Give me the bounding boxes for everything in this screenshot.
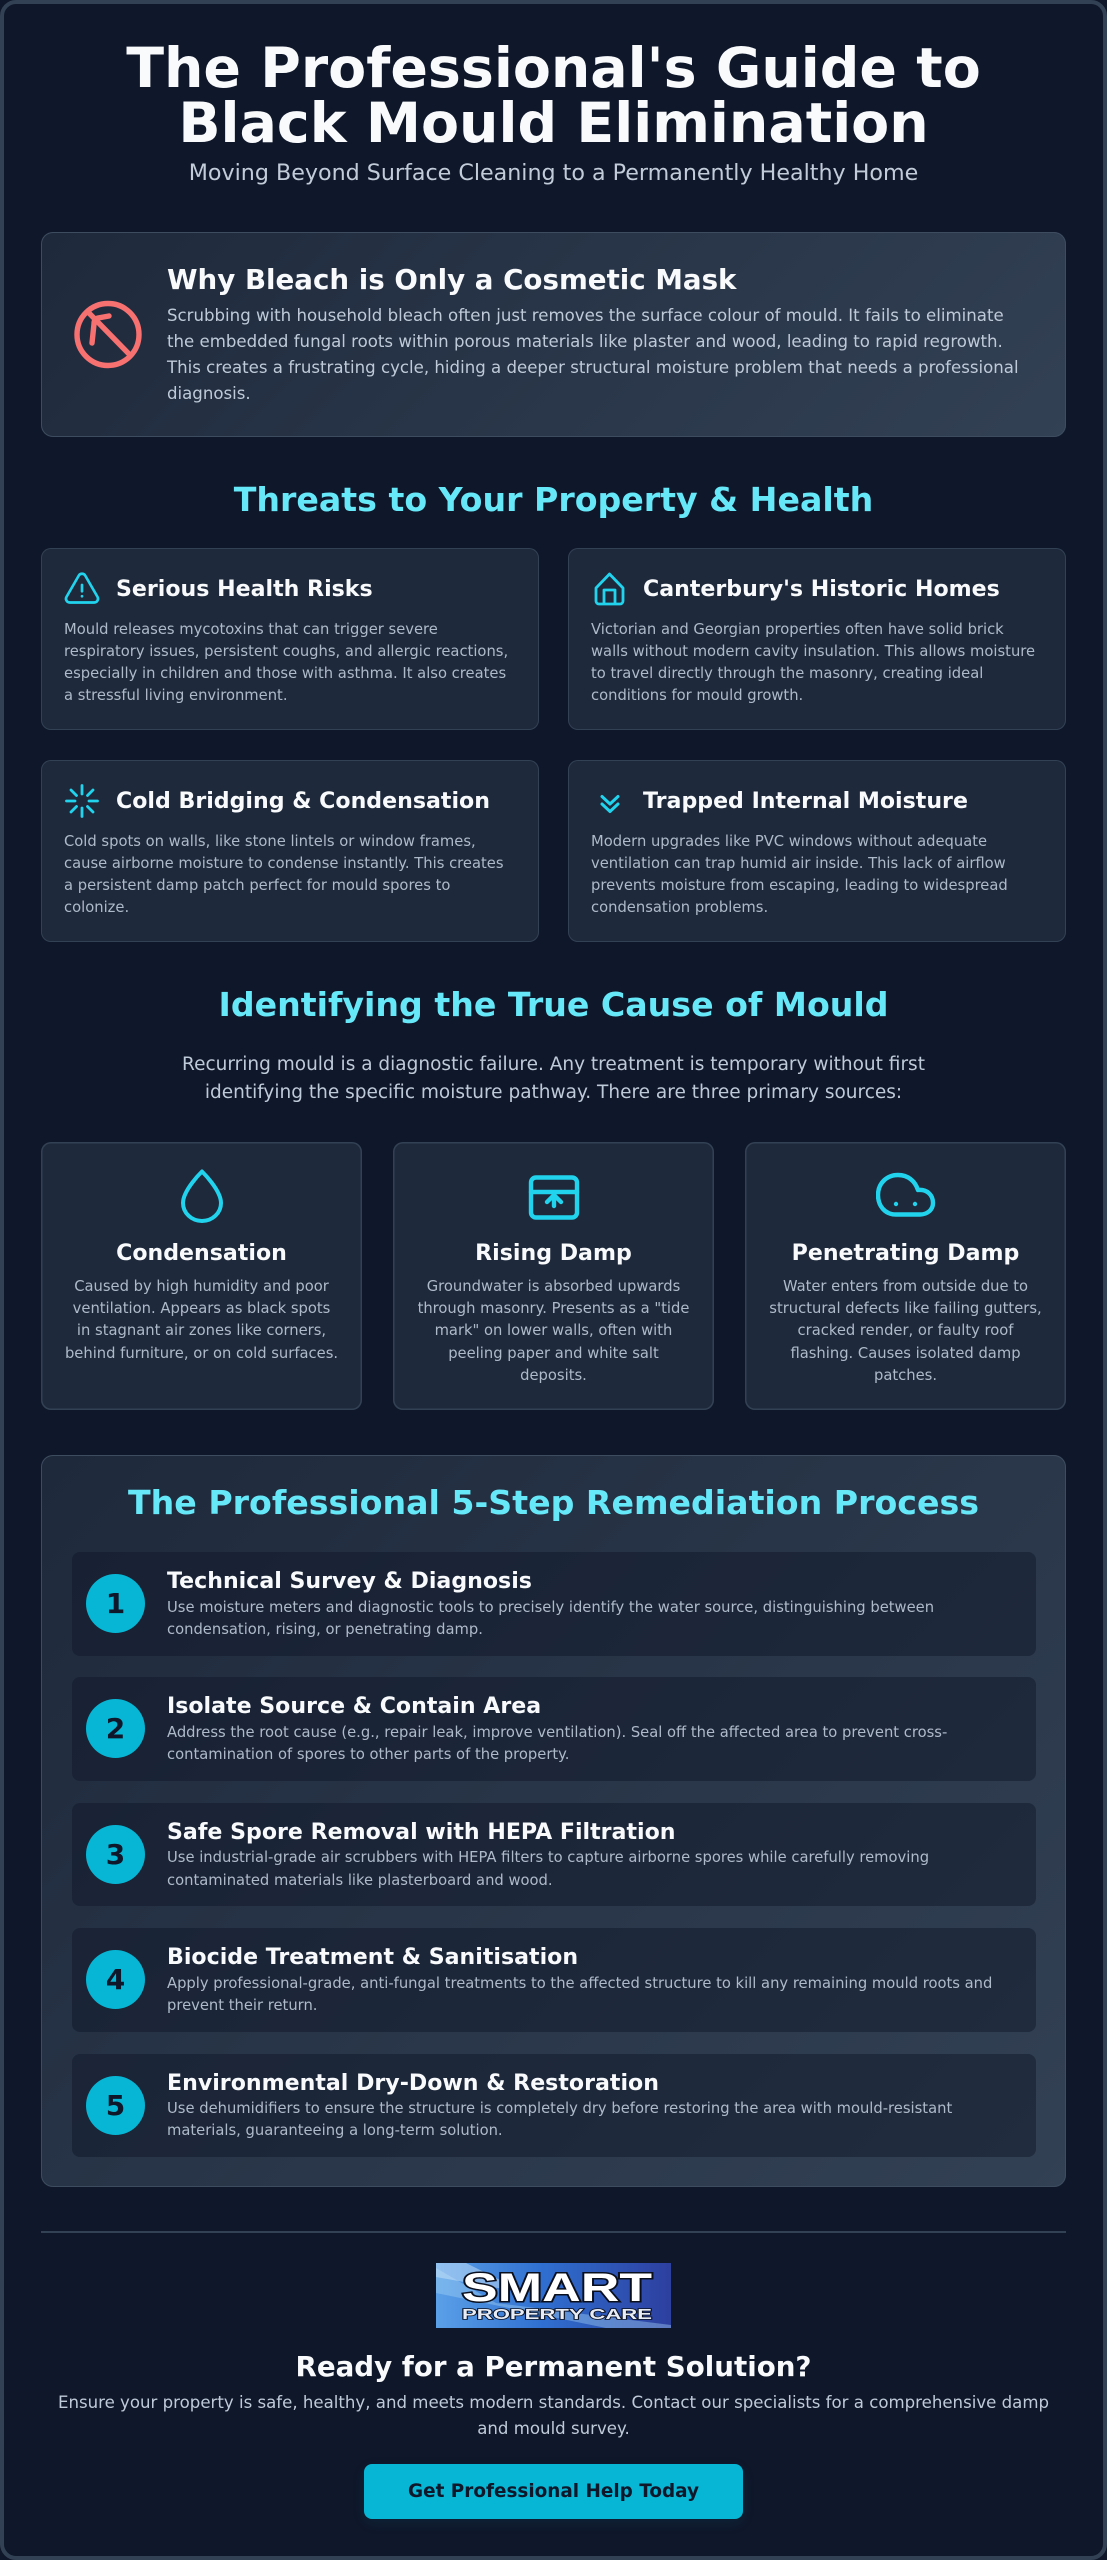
card text: Modern upgrades like PVC windows without adequate [591,832,987,850]
panel: rising damp [393,1142,714,1410]
icon: rising arrow [528,1175,580,1220]
card text [64,832,504,916]
panel: cold bridging [41,760,539,942]
card text: cause airborne moisture to condense instantly. This creates [64,855,504,872]
step number [86,1825,145,1884]
card heading: Serious Health Risks [116,576,373,602]
step text [167,1849,929,1888]
card text: Caused by high humidity and poor [74,1278,329,1295]
panel: remediation process [41,1455,1066,2187]
card text [418,1278,689,1384]
step title: Isolate Source & Contain Area [167,1693,541,1719]
panel: penetrating damp [745,1142,1066,1410]
step 4 [72,1928,1036,2032]
step title: Technical Survey & Diagnosis [167,1568,532,1594]
step text [167,2100,952,2139]
card heading: Trapped Internal Moisture [643,788,968,814]
bleach body text: the embedded fungal roots within porous materials like plaster and wood, leading to rapid regrowth. [167,332,1003,351]
card text [591,832,1008,916]
bleach body text [166,306,1019,403]
title: The Professional's Guide to [126,36,981,100]
step 5 [72,2054,1036,2157]
card text: prevents moisture from escaping, leading to widespread [591,877,1008,894]
panel: why bleach is only a cosmetic mask [41,232,1066,437]
logo: smart property care [436,2263,671,2328]
panel: condensation [41,1142,362,1410]
step text: condensation, rising, or penetrating damp. [167,1621,483,1638]
card heading: Rising Damp [475,1240,632,1266]
card text: colonize. [64,899,129,916]
card text: flashing. Causes isolated damp [790,1345,1021,1362]
step title: Safe Spore Removal with HEPA Filtration [167,1819,676,1845]
bleach body text: Scrubbing with household bleach often just removes the surface colour of mould. It fails to eliminate [167,306,1004,325]
card text: Mould releases mycotoxins that can trigger severe [64,620,438,638]
card text [591,620,1035,704]
card text: through masonry. Presents as a "tide [418,1300,689,1317]
card text: patches. [874,1367,937,1384]
cta text: and mould survey. [477,2419,630,2438]
card text: behind furniture, or on cold surfaces. [65,1345,338,1362]
step number [86,1574,145,1633]
cta text [58,2393,1049,2438]
step number: 1 [106,1587,125,1620]
card text: mark" on lower walls, often with [435,1322,672,1339]
step number: 2 [106,1712,125,1745]
card text: condensation problems. [591,899,768,916]
step text: Address the root cause (e.g., repair leak, improve ventilation). Seal off the affected area to prevent cross- [167,1724,947,1741]
subtitle: Moving Beyond Surface Cleaning to a Permanently Healthy Home [189,160,918,186]
step text: contaminated materials like plasterboard and wood. [167,1872,553,1888]
cta button: Get Professional Help Today [408,2481,699,2502]
card text: ventilation can trap humid air inside. This lack of airflow [591,855,1006,872]
step text: materials, guaranteeing a long-term solution. [167,2122,503,2139]
icon: double chevron [600,794,620,814]
step text: Use industrial-grade air scrubbers with HEPA filters to capture airborne spores while carefully removing [167,1849,929,1866]
icon: spark rays [65,784,99,818]
cta heading: Ready for a Permanent Solution? [296,2350,812,2382]
step number [86,2076,145,2135]
card text: Victorian and Georgian properties often have solid brick [591,620,1004,638]
panel: historic homes [568,548,1066,730]
step text [167,1975,992,2014]
card text: peeling paper and white salt [448,1345,659,1362]
step number: 5 [106,2089,125,2122]
step text: prevent their return. [167,1997,318,2014]
step number: 4 [106,1963,125,1996]
panel: serious health risks [41,548,539,730]
bleach heading: Why Bleach is Only a Cosmetic Mask [167,262,736,296]
icon: warning triangle [64,572,100,604]
card text: in stagnant air zones like corners, [77,1322,326,1339]
heading: true cause: Identifying the True Cause of Mould [218,985,889,1024]
card text [769,1278,1042,1384]
intro text [182,1054,925,1103]
card text: a persistent damp patch perfect for mould spores to [64,877,450,894]
panel: trapped moisture [568,760,1066,942]
title: Black Mould Elimination [178,92,929,156]
step title: Biocide Treatment & Sanitisation [167,1944,578,1970]
card text: a stressful living environment. [64,687,288,704]
logo: smart property care: SMART [462,2266,652,2310]
step number [86,1699,145,1758]
card heading: Canterbury's Historic Homes [643,576,1000,602]
card text: ventilation. Appears as black spots [73,1300,330,1317]
step 2 [72,1677,1036,1781]
step 1 [72,1552,1036,1656]
step text: contamination of spores to other parts of the property. [167,1746,569,1763]
icon: no bleach [74,300,142,368]
card text: to travel directly through the masonry, creating ideal [591,665,983,682]
card text: respiratory issues, persistent coughs, and allergic reactions, [64,643,508,660]
heading: threats: Threats to Your Property & Health [234,480,873,519]
step text [167,1598,934,1638]
cta text: Ensure your property is safe, healthy, and meets modern standards. Contact our specialists for a comprehensive damp [58,2393,1049,2412]
title [126,36,981,156]
icon: house [594,572,624,606]
card text: conditions for mould growth. [591,687,803,704]
step text: Apply professional-grade, anti-fungal treatments to the affected structure to kill any remaining mould roots and [167,1975,992,1992]
intro text: Recurring mould is a diagnostic failure. Any treatment is temporary without first [182,1054,925,1075]
step text: Use dehumidifiers to ensure the structure is completely dry before restoring the area with mould-resistant [167,2100,952,2117]
card text: cracked render, or faulty roof [798,1322,1013,1339]
card text: Cold spots on walls, like stone lintels or window frames, [64,832,476,850]
card text: especially in children and those with asthma. It also creates [64,665,506,682]
card text: Water enters from outside due to [783,1278,1028,1295]
process heading: The Professional 5-Step Remediation Process [128,1483,979,1522]
cta button [364,2464,743,2519]
step text: Use moisture meters and diagnostic tools to precisely identify the water source, distinguishing between [167,1598,934,1616]
card text: deposits. [520,1367,587,1384]
card heading: Condensation [116,1240,287,1266]
card heading: Cold Bridging & Condensation [116,788,490,814]
intro text: identifying the specific moisture pathway. There are three primary sources: [205,1082,902,1103]
icon: water drop [181,1169,223,1223]
card heading: Penetrating Damp [792,1240,1019,1266]
header [126,36,981,186]
step 3 [72,1803,1036,1906]
step number: 3 [106,1838,125,1871]
step number [86,1950,145,2009]
logo: smart property care: PROPERTY CARE [462,2306,652,2323]
card text: walls without modern cavity insulation. This allows moisture [591,643,1035,660]
card text: structural defects like failing gutters, [769,1300,1042,1317]
step text [167,1724,947,1763]
card text [64,620,508,704]
bleach body text: This creates a frustrating cycle, hiding a deeper structural moisture problem that needs a professional [167,358,1019,377]
card text: Groundwater is absorbed upwards [427,1278,680,1295]
bleach body text: diagnosis. [167,384,251,403]
card text [65,1278,338,1362]
step title: Environmental Dry-Down & Restoration [167,2070,659,2096]
icon: cloud [876,1172,936,1217]
